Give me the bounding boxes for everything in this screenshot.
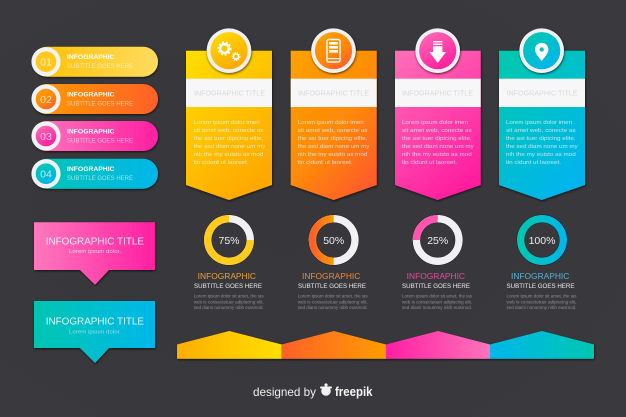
donut chart 25%: 25% bbox=[427, 235, 448, 247]
footer credit: designed by bbox=[253, 385, 316, 399]
donut chart 50% bbox=[312, 219, 355, 261]
text block: column 2 bbox=[298, 272, 368, 310]
body text: tin cidunt ut laoreet. bbox=[506, 160, 561, 166]
donut chart 50%: 50% bbox=[323, 235, 344, 247]
text block: column 2: sed diami nonummy nibh euismod. bbox=[298, 305, 368, 310]
body text: the asi tuer dipicing elite, bbox=[194, 136, 264, 142]
body text: tin cidunt ut laoreet. bbox=[402, 160, 457, 166]
arrow band bbox=[177, 331, 594, 359]
body text bbox=[506, 120, 578, 166]
text block: column 3: SUBTITLE GOES HERE bbox=[402, 283, 470, 290]
body text: sit amet web, conecte as bbox=[194, 128, 264, 134]
footer credit bbox=[253, 383, 373, 399]
callout: pink bbox=[34, 222, 155, 285]
icon: freepik mascot bbox=[320, 383, 332, 396]
text block: column 2: Lorem ipsum dolor sit amet, the ias bbox=[298, 294, 368, 299]
icon: phone bbox=[311, 28, 356, 73]
body text bbox=[194, 120, 266, 166]
segment pink bbox=[386, 331, 490, 359]
text block: column 2: web is consectetuer adipiscing elit, bbox=[298, 299, 368, 304]
pill 04: 04 bbox=[40, 168, 52, 180]
body text: Lorem ipsum dolor imen bbox=[194, 120, 260, 126]
pill 03 bbox=[31, 121, 158, 151]
panel: orange banner: INFOGRAPHIC TITLE bbox=[298, 88, 369, 98]
text block: column 1: SUBTITLE GOES HERE bbox=[194, 283, 262, 290]
callout: pink: Lorem ipsum dolor. bbox=[69, 249, 122, 255]
pill 03: 03 bbox=[40, 131, 52, 143]
pill 03: INFOGRAPHIC bbox=[67, 129, 115, 136]
body text: Lorem ipsum dolor imen bbox=[506, 120, 572, 126]
text block: column 4: web is consectetuer adipiscing elit, bbox=[506, 299, 576, 304]
text block: column 2: INFOGRAPHIC bbox=[302, 272, 360, 281]
pill 02: INFOGRAPHIC bbox=[67, 91, 115, 98]
body text: the asi tuer dipicing elite, bbox=[506, 136, 576, 142]
body text: sit amet web, conecte as bbox=[402, 128, 472, 134]
numbered pill list bbox=[31, 47, 158, 189]
text block: column 1 bbox=[194, 272, 264, 310]
panel: pink banner: INFOGRAPHIC TITLE bbox=[402, 88, 473, 98]
text block: column 1: INFOGRAPHIC bbox=[198, 272, 256, 281]
body text: Lorem ipsum dolor imen bbox=[402, 120, 468, 126]
text block: column 1: web is consectetuer adipiscing elit, bbox=[194, 299, 264, 304]
body text: nih the my euisto as mod bbox=[506, 152, 576, 158]
body text: sit amet web, conecte as bbox=[506, 128, 576, 134]
callout: teal: INFOGRAPHIC TITLE bbox=[46, 316, 144, 328]
pill 02 bbox=[31, 84, 158, 114]
pill 01: 01 bbox=[40, 56, 52, 68]
icon: location pin bbox=[519, 28, 564, 73]
donut chart 100%: 100% bbox=[529, 235, 555, 247]
panel: teal banner: INFOGRAPHIC TITLE bbox=[506, 88, 578, 98]
body text: nih the my euisto as mod bbox=[402, 152, 472, 158]
body text: tin cidunt ut laoreet. bbox=[194, 160, 249, 166]
body text: sit amet web, conecte as bbox=[298, 128, 368, 134]
text block: column 3: sed diami nonummy nibh euismod. bbox=[402, 305, 472, 310]
donut chart 25% bbox=[416, 219, 459, 261]
icon: download arrow bbox=[415, 28, 460, 73]
pill 01 bbox=[31, 47, 158, 77]
body text: tin cidunt ut laoreet. bbox=[298, 160, 353, 166]
body text: Lorem ipsum dolor imen bbox=[298, 120, 364, 126]
callout: teal bbox=[34, 301, 155, 363]
text block: column 4: SUBTITLE GOES HERE bbox=[506, 283, 574, 290]
text block: column 3 bbox=[402, 272, 473, 310]
pill 01: SUBTITLE GOES HERE bbox=[67, 63, 133, 70]
segment yellow bbox=[177, 331, 282, 359]
text block: column 4: sed diami nonummy nibh euismod. bbox=[506, 305, 576, 310]
text block: column 4: INFOGRAPHIC bbox=[511, 272, 569, 281]
pill 01: INFOGRAPHIC bbox=[67, 54, 115, 61]
callout: teal: Lorem ipsum dolor. bbox=[69, 330, 122, 336]
body text: the sed diam none um my bbox=[402, 144, 474, 150]
donut chart 75% bbox=[208, 219, 250, 261]
body text bbox=[298, 120, 370, 166]
text block: column 1: sed diami nonummy nibh euismod. bbox=[194, 305, 264, 310]
panel: yellow banner bbox=[186, 28, 272, 200]
callout: pink: INFOGRAPHIC TITLE bbox=[46, 236, 144, 247]
text block: column 4: Lorem ipsum dolor sit amet, the ias bbox=[506, 294, 577, 299]
body text: nih the my euisto as mod bbox=[194, 152, 263, 158]
body text bbox=[402, 120, 474, 166]
panel: pink banner bbox=[395, 28, 481, 200]
text block: column 2: SUBTITLE GOES HERE bbox=[298, 283, 366, 290]
pill 04: INFOGRAPHIC bbox=[67, 166, 115, 173]
panel: orange banner bbox=[291, 28, 377, 200]
text block: column 3: web is consectetuer adipiscing elit, bbox=[402, 299, 472, 304]
pill 02: 02 bbox=[40, 94, 52, 106]
body text: the sed diam none um my bbox=[298, 144, 370, 150]
pill 04: SUBTITLE GOES HERE bbox=[67, 175, 133, 182]
body text: the sed diam none um my bbox=[194, 144, 266, 150]
panel: yellow banner: INFOGRAPHIC TITLE bbox=[194, 88, 265, 98]
body text: nih the my euisto as mod bbox=[298, 152, 367, 158]
text block: column 4 bbox=[506, 272, 577, 310]
pill 03: SUBTITLE GOES HERE bbox=[67, 138, 133, 145]
segment orange bbox=[282, 331, 386, 359]
pill 04 bbox=[31, 159, 158, 189]
footer credit: freepik bbox=[335, 385, 373, 399]
panel: teal banner bbox=[499, 28, 585, 200]
body text: the sed diam none um my bbox=[506, 144, 578, 150]
pill 02: SUBTITLE GOES HERE bbox=[67, 100, 133, 107]
text block: column 1: Lorem ipsum dolor sit amet, the ias bbox=[194, 294, 264, 299]
donut chart 100% bbox=[521, 219, 563, 261]
segment teal bbox=[490, 331, 594, 359]
body text: the asi tuer dipicing elite, bbox=[298, 136, 368, 142]
icon: gears bbox=[207, 28, 251, 73]
text block: column 3: INFOGRAPHIC bbox=[407, 272, 465, 281]
text block: column 3: Lorem ipsum dolor sit amet, the ias bbox=[402, 294, 473, 299]
donut chart 75%: 75% bbox=[218, 235, 240, 247]
body text: the asi tuer dipicing elite, bbox=[402, 136, 472, 142]
